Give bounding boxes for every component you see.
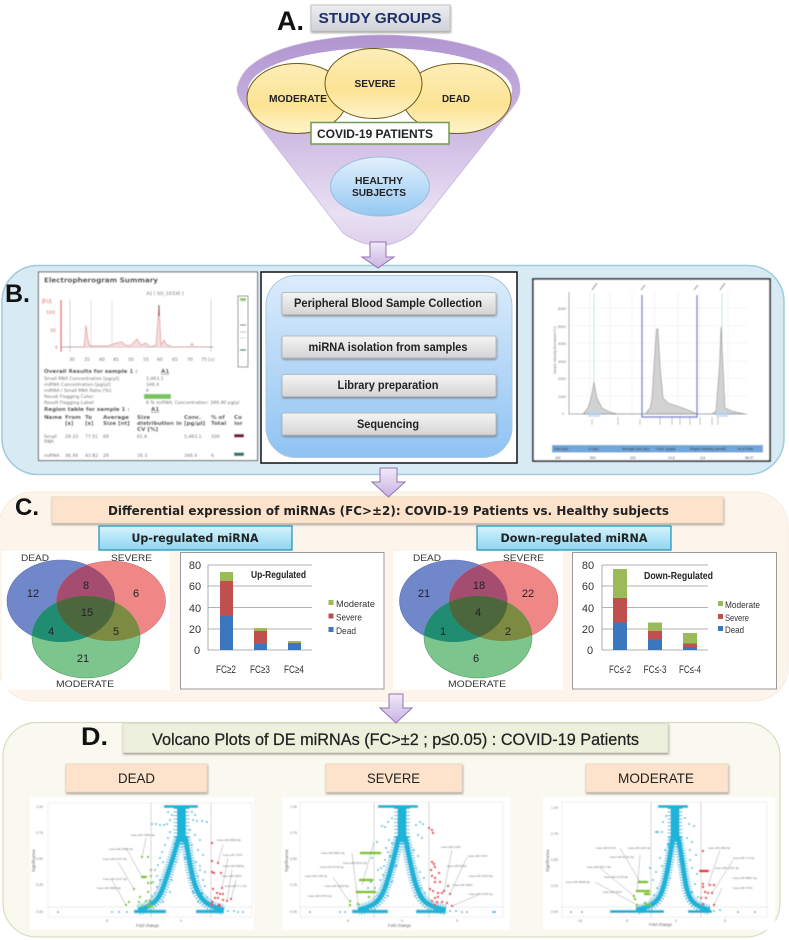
step: sequencing bbox=[282, 413, 496, 435]
volcano plot: severe: hsa-miR-7974 bbox=[468, 854, 488, 858]
stacked bar chart: down-regulated: Severe bbox=[725, 613, 749, 624]
electropherogram summary: To bbox=[85, 415, 92, 421]
electropherogram summary: Average bbox=[103, 415, 129, 421]
electropherogram summary: 70 bbox=[187, 357, 193, 363]
electropherogram summary: lor bbox=[234, 421, 243, 427]
volcano plot: dead: 0.75 bbox=[36, 831, 43, 835]
electropherogram summary: 45 bbox=[113, 357, 119, 363]
venn diagram: down-regulated: MODERATE bbox=[448, 679, 506, 689]
step: miRNA isolation bbox=[282, 336, 496, 358]
small RNA bioanalyzer trace: Start (bp) bbox=[554, 447, 568, 451]
electropherogram summary: Result Flagging Color: bbox=[44, 394, 95, 400]
electropherogram summary bbox=[38, 272, 258, 460]
volcano plot: severe: hsa-miR-1269 bbox=[441, 845, 461, 849]
stacked bar chart: down-regulated: FC≤-4 bbox=[679, 664, 701, 676]
electropherogram summary: 36.46 bbox=[65, 453, 78, 459]
volcano plot: severe: 5 bbox=[456, 919, 458, 923]
volcano plot: severe: hsa-miR-3926-5p bbox=[325, 884, 349, 888]
stacked bar chart: up-regulated: FC≥4 bbox=[284, 664, 304, 676]
stacked bar chart: down-regulated bbox=[572, 552, 776, 689]
volcano plot: severe: 0.25 bbox=[290, 883, 297, 887]
oval: moderate bbox=[247, 64, 347, 134]
volcano plot: moderate: hsa-miR-5617-5p bbox=[587, 865, 611, 869]
volcano plot: dead: hsa-miR-7-1-3p bbox=[225, 884, 247, 888]
volcano plot: dead: hsa-miR-6869-5p bbox=[217, 838, 241, 842]
heading: study groups bbox=[311, 5, 450, 31]
oval: dead bbox=[403, 64, 511, 134]
venn diagram: up-regulated: MODERATE bbox=[56, 679, 114, 689]
panel background D bbox=[3, 722, 780, 937]
volcano plot: moderate bbox=[543, 797, 775, 930]
panel background C bbox=[0, 492, 788, 701]
workflow box bbox=[261, 272, 517, 463]
small RNA bioanalyzer trace: 14.8 bbox=[668, 456, 675, 460]
volcano plot: dead: 0.25 bbox=[36, 883, 43, 887]
stacked bar chart: down-regulated: 80 bbox=[582, 560, 594, 572]
electropherogram summary: 6 % miRNA; Concentration: 346.40 pg/µl bbox=[146, 400, 239, 406]
electropherogram summary: Size bbox=[137, 415, 150, 421]
venn diagram: down-regulated: 22 bbox=[522, 588, 534, 600]
letter A: A. bbox=[277, 6, 304, 36]
section D: volcano plots panel bbox=[3, 722, 780, 937]
oval: healthy subjects bbox=[330, 157, 430, 216]
electropherogram summary: 100 bbox=[211, 434, 220, 440]
volcano plot: moderate: hsa-miR-6887-3p bbox=[733, 876, 757, 880]
stacked bar chart: up-regulated: FC≥3 bbox=[250, 664, 270, 676]
venn diagram: down-regulated: 21 bbox=[418, 588, 430, 600]
stacked bar chart: down-regulated: Moderate bbox=[725, 600, 760, 611]
venn diagram: down-regulated: 18 bbox=[473, 580, 485, 592]
heading: volcano plots bbox=[123, 724, 668, 752]
oval: severe: SEVERE bbox=[354, 79, 396, 90]
electropherogram summary: A1 [ SO_10330 ] bbox=[146, 291, 184, 297]
venn diagram: up-regulated: 5 bbox=[113, 626, 119, 638]
volcano plot: severe: hsa-miR-6752-3p bbox=[308, 894, 332, 898]
electropherogram summary: 55 bbox=[143, 357, 149, 363]
small RNA bioanalyzer trace: 6000 bbox=[558, 307, 566, 311]
volcano plot: dead: Significance bbox=[31, 849, 36, 872]
heading: differential expression: Differential expression of miRNAs (FC>±2): COVID-19 Patients vs. Healthy subjects bbox=[108, 503, 669, 518]
label: moderate bbox=[586, 764, 728, 792]
volcano plot: dead: hsa-miR-3127-3p bbox=[103, 877, 127, 881]
stacked bar chart: up-regulated: 20 bbox=[189, 624, 201, 636]
small RNA bioanalyzer trace: 5000 bbox=[558, 325, 566, 329]
small RNA bioanalyzer trace: 98.07 bbox=[745, 456, 754, 460]
volcano plot: dead: hsa-miR-3605 bbox=[222, 874, 242, 878]
heading: down-regulated bbox=[477, 526, 671, 550]
small RNA bioanalyzer trace: 114 bbox=[700, 456, 706, 460]
volcano plot: severe: hsa-miR-1843-5p bbox=[469, 874, 493, 878]
electropherogram summary: 6 bbox=[211, 453, 214, 459]
small RNA bioanalyzer trace: 500 bbox=[590, 456, 596, 460]
small RNA bioanalyzer trace: % of Total bbox=[738, 447, 753, 451]
electropherogram summary: 30 bbox=[69, 357, 75, 363]
venn diagram: down-regulated: 4 bbox=[475, 607, 481, 619]
stacked bar chart: down-regulated: Dead bbox=[725, 625, 744, 636]
volcano plot: severe: 0.50 bbox=[290, 857, 297, 861]
venn diagram: up-regulated: 4 bbox=[48, 626, 54, 638]
volcano plot: moderate: hsa-miR-339-3p bbox=[628, 846, 650, 850]
stacked bar chart: up-regulated bbox=[180, 552, 384, 689]
electropherogram summary: miRNA / Small RNA Ratio [%]: bbox=[44, 388, 113, 394]
electropherogram summary: 346.4 bbox=[146, 382, 159, 388]
panel background B bbox=[2, 266, 784, 474]
volcano plot: moderate: 1.00 bbox=[551, 806, 558, 810]
volcano plot: moderate: hsa-miR-490-5p bbox=[708, 846, 730, 850]
stacked bar chart: down-regulated: 20 bbox=[582, 624, 594, 636]
oval: moderate: MODERATE bbox=[269, 94, 327, 105]
volcano plot: dead bbox=[30, 797, 254, 930]
electropherogram summary: Co bbox=[234, 415, 242, 421]
small RNA bioanalyzer trace: 100 bbox=[555, 456, 561, 460]
volcano plot: severe: Significance bbox=[284, 849, 289, 872]
volcano plot: moderate: 0.75 bbox=[551, 832, 558, 836]
volcano plot: moderate: 5 bbox=[724, 919, 726, 923]
volcano plot: dead: hsa-miR-6727-5p bbox=[103, 857, 127, 861]
oval: healthy subjects: SUBJECTS bbox=[352, 188, 406, 199]
electropherogram summary: Electropherogram Summary bbox=[44, 276, 159, 284]
arrow A to B bbox=[362, 242, 394, 268]
heading: down-regulated: Down-regulated miRNA bbox=[500, 531, 648, 545]
oval: dead: DEAD bbox=[442, 94, 470, 105]
small RNA bioanalyzer trace: Conc. (pg/µl) bbox=[656, 447, 675, 451]
volcano plot: dead: 0 bbox=[180, 919, 182, 923]
volcano plot: dead: 0.00 bbox=[36, 910, 43, 914]
step: miRNA isolation: miRNA isolation from samples bbox=[308, 340, 468, 354]
label: covid-19 patients bbox=[311, 122, 449, 144]
stacked bar chart: down-regulated: Down-Regulated bbox=[644, 571, 713, 582]
stacked bar chart: up-regulated: Dead bbox=[336, 626, 356, 637]
volcano plot: severe: hsa-miR-4749-3p bbox=[320, 865, 344, 869]
volcano plot: dead: hsa-miR-3065-3p bbox=[109, 847, 133, 851]
step: blood collection bbox=[282, 292, 496, 314]
volcano plot: moderate: hsa-miR-7-2-3p bbox=[733, 856, 755, 860]
volcano plot: severe: 0.75 bbox=[290, 831, 297, 835]
electropherogram summary: 16.3 bbox=[137, 453, 147, 459]
step: library preparation: Library preparation bbox=[338, 378, 438, 392]
volcano plot: moderate: hsa-miR-6729-3p bbox=[610, 855, 634, 859]
small RNA bioanalyzer trace: Sample Intensity [Normalized FU] bbox=[553, 326, 557, 374]
electropherogram summary: 43.82 bbox=[85, 453, 98, 459]
volcano plot: dead: 0.50 bbox=[36, 857, 43, 861]
section C: differential expression panel bbox=[0, 492, 788, 701]
electropherogram summary: [pg/µl] bbox=[184, 421, 206, 427]
electropherogram summary: 60 bbox=[157, 357, 163, 363]
venn diagram: down-regulated: 1 bbox=[440, 626, 446, 638]
stacked bar chart: up-regulated: Severe bbox=[336, 612, 362, 624]
electropherogram summary: 75 [s] bbox=[201, 357, 214, 363]
stacked bar chart: down-regulated: 0 bbox=[587, 645, 593, 657]
arrow C to D bbox=[380, 694, 412, 723]
electropherogram summary: 50 bbox=[50, 328, 56, 334]
stacked bar chart: down-regulated: FC≤-3 bbox=[644, 664, 666, 676]
stacked bar chart: up-regulated: FC≥2 bbox=[216, 664, 236, 676]
venn diagram: up-regulated: 12 bbox=[27, 588, 39, 600]
label: covid-19 patients: COVID-19 PATIENTS bbox=[317, 129, 433, 141]
volcano plot: dead: hsa-miR-7974 bbox=[223, 853, 243, 857]
small RNA bioanalyzer trace: Region Molarity (nmol/l) bbox=[690, 447, 726, 451]
venn diagram: up-regulated: 21 bbox=[77, 653, 89, 665]
letter B: B. bbox=[5, 280, 30, 308]
volcano plot: moderate: hsa-miR-3126-3p bbox=[604, 875, 628, 879]
electropherogram summary: Size [nt] bbox=[103, 421, 130, 427]
electropherogram summary: [s] bbox=[85, 421, 94, 427]
small RNA bioanalyzer trace: 4000 bbox=[558, 342, 566, 346]
oval: severe bbox=[325, 48, 422, 118]
volcano plot: dead: -5 bbox=[105, 919, 108, 923]
electropherogram summary: 0 bbox=[55, 345, 58, 351]
volcano plot: severe: hsa-miR-128-3p bbox=[305, 874, 327, 878]
venn diagram: up-regulated: 6 bbox=[133, 588, 139, 600]
electropherogram summary: 69 bbox=[103, 434, 109, 440]
volcano plot: moderate: Significance bbox=[545, 849, 550, 872]
electropherogram summary: 346.4 bbox=[184, 453, 197, 459]
small RNA bioanalyzer trace: 233 bbox=[630, 456, 636, 460]
section A: study groups bbox=[237, 5, 520, 246]
small RNA bioanalyzer trace bbox=[533, 279, 770, 461]
small RNA bioanalyzer trace: 1000 bbox=[558, 395, 566, 399]
volcano plot: moderate: hsa-miR-4698-5p bbox=[566, 880, 590, 884]
label: severe bbox=[326, 764, 462, 792]
volcano plot: moderate: -5 bbox=[625, 919, 628, 923]
electropherogram summary: 61.6 bbox=[137, 434, 147, 440]
label: dead bbox=[66, 764, 207, 792]
electropherogram summary: 100 bbox=[46, 310, 55, 316]
heading: up-regulated: Up-regulated miRNA bbox=[132, 531, 259, 545]
electropherogram summary: 40 bbox=[99, 357, 105, 363]
heading: volcano plots: Volcano Plots of DE miRNAs (FC>±2 ; p≤0.05) : COVID-19 Patients bbox=[152, 730, 639, 749]
electropherogram summary: 77.01 bbox=[85, 434, 98, 440]
label: severe: SEVERE bbox=[367, 770, 420, 786]
volcano plot: severe: 1.00 bbox=[290, 805, 297, 809]
heading: differential expression bbox=[52, 497, 723, 523]
volcano plot: dead: Fold change bbox=[136, 923, 160, 928]
oval: healthy subjects: HEALTHY bbox=[355, 176, 403, 187]
volcano plot: moderate: hsa-miR-7974 bbox=[733, 886, 753, 890]
electropherogram summary: RNA bbox=[44, 439, 55, 445]
venn diagram: down-regulated: 6 bbox=[473, 653, 479, 665]
small RNA bioanalyzer trace: 2000 bbox=[558, 377, 566, 381]
venn diagram: up-regulated: 8 bbox=[83, 580, 89, 592]
volcano plot: severe: hsa-miR-5010-3p bbox=[343, 861, 367, 865]
venn diagram: up-regulated bbox=[0, 550, 170, 690]
electropherogram summary: 65 bbox=[172, 357, 178, 363]
volcano plot: severe: hsa-miR-5195-3p bbox=[469, 892, 493, 896]
electropherogram summary: Small bbox=[44, 434, 57, 440]
electropherogram summary: [FU] bbox=[42, 299, 52, 305]
volcano plot: moderate: 0 bbox=[675, 919, 677, 923]
venn diagram: down-regulated: 2 bbox=[505, 626, 511, 638]
electropherogram summary: From bbox=[65, 415, 81, 421]
electropherogram summary: A1 bbox=[161, 369, 169, 375]
electropherogram summary: Result Flagging Label: bbox=[44, 400, 95, 406]
step: sequencing: Sequencing bbox=[357, 417, 419, 431]
stacked bar chart: up-regulated: 0 bbox=[194, 645, 200, 657]
stacked bar chart: down-regulated: FC≤-2 bbox=[609, 664, 631, 676]
electropherogram summary: 6 bbox=[146, 388, 149, 394]
volcano plot: severe: Fold change bbox=[388, 923, 412, 928]
stacked bar chart: up-regulated: Moderate bbox=[336, 599, 375, 610]
stacked bar chart: up-regulated: 60 bbox=[189, 581, 201, 593]
small RNA bioanalyzer trace: 3000 bbox=[558, 360, 566, 364]
small RNA bioanalyzer trace: To (bp) bbox=[588, 447, 599, 451]
venn diagram: up-regulated: DEAD bbox=[21, 553, 50, 563]
volcano plot: severe: hsa-miR-5010 bbox=[447, 864, 467, 868]
electropherogram summary: Conc. bbox=[184, 415, 201, 421]
letter D: D. bbox=[81, 723, 108, 751]
section B: sample processing panel bbox=[2, 266, 784, 474]
volcano plot: moderate: 0.00 bbox=[551, 910, 558, 914]
volcano plot: moderate: hsa-miR-6729 bbox=[596, 846, 616, 850]
label: moderate: MODERATE bbox=[618, 770, 694, 786]
heading: up-regulated bbox=[99, 526, 292, 550]
electropherogram summary: 29 bbox=[103, 453, 109, 459]
stacked bar chart: up-regulated: 40 bbox=[189, 603, 201, 615]
volcano plot: severe: -5 bbox=[346, 919, 349, 923]
heading: study groups: STUDY GROUPS bbox=[318, 11, 442, 27]
volcano plot: severe: hsa-miR-3950 bbox=[453, 883, 473, 887]
electropherogram summary: CV [%] bbox=[137, 427, 159, 433]
venn diagram: up-regulated: 15 bbox=[81, 607, 93, 619]
volcano plot: dead: hsa-miR-7852-3p bbox=[131, 833, 155, 837]
label: dead: DEAD bbox=[118, 770, 155, 786]
volcano plot: severe: 0.00 bbox=[290, 910, 297, 914]
venn diagram: down-regulated: DEAD bbox=[413, 553, 442, 563]
letter C: C. bbox=[15, 494, 39, 521]
electropherogram summary: miRNA Concentration [pg/µl]: bbox=[44, 382, 112, 388]
electropherogram summary: Overall Results for sample 1 : bbox=[44, 369, 137, 375]
volcano plot: moderate: hsa-miR-3617 bbox=[603, 890, 623, 894]
arrow B to C bbox=[372, 468, 405, 497]
volcano plot: moderate: 0.50 bbox=[551, 858, 558, 862]
electropherogram summary: 35 bbox=[84, 357, 90, 363]
electropherogram summary: 29.33 bbox=[65, 434, 78, 440]
volcano plot: moderate: 0.25 bbox=[551, 884, 558, 888]
electropherogram summary: Name bbox=[44, 415, 62, 421]
volcano plot: dead: hsa-miR-5585p bbox=[223, 864, 244, 868]
volcano plot: severe: hsa-miR-6891-5p bbox=[321, 851, 345, 855]
electropherogram summary: % of bbox=[211, 415, 225, 421]
electropherogram summary: Region table for sample 1 : bbox=[44, 407, 130, 413]
venn diagram: down-regulated bbox=[393, 550, 563, 690]
stacked bar chart: down-regulated: 40 bbox=[582, 603, 594, 615]
volcano plot: dead: 1.00 bbox=[36, 805, 43, 809]
electropherogram summary: [s] bbox=[65, 421, 74, 427]
electropherogram summary: 5,463.1 bbox=[184, 434, 202, 440]
electropherogram summary: A1 bbox=[151, 407, 159, 413]
volcano plot: moderate: Fold change bbox=[649, 922, 673, 927]
step: library preparation bbox=[282, 374, 496, 396]
step: blood collection: Peripheral Blood Sample Collection bbox=[294, 296, 482, 310]
small RNA bioanalyzer trace: 0 bbox=[562, 412, 564, 416]
electropherogram summary: miRNA bbox=[44, 453, 60, 459]
volcano plot: dead: hsa-miR-4685-3p bbox=[97, 886, 121, 890]
electropherogram summary: distribution in bbox=[137, 421, 182, 427]
electropherogram summary: 50 bbox=[128, 357, 134, 363]
venn diagram: down-regulated: SEVERE bbox=[503, 553, 544, 563]
volcano plot: severe bbox=[282, 797, 510, 930]
electropherogram summary: Total bbox=[211, 421, 226, 427]
small RNA bioanalyzer trace: Average Size (bp) bbox=[622, 447, 649, 451]
stacked bar chart: down-regulated: 60 bbox=[582, 581, 594, 593]
funnel bbox=[237, 35, 520, 246]
volcano plot: severe: 0 bbox=[401, 919, 403, 923]
electropherogram summary: Small RNA Concentration [pg/µl]: bbox=[44, 376, 121, 382]
volcano plot: moderate: -10 bbox=[577, 919, 582, 923]
stacked bar chart: up-regulated: Up-Regulated bbox=[251, 570, 306, 581]
volcano plot: moderate: hsa-miR-1301-3p bbox=[715, 866, 739, 870]
venn diagram: up-regulated: SEVERE bbox=[111, 553, 152, 563]
stacked bar chart: up-regulated: 80 bbox=[189, 560, 201, 572]
electropherogram summary: 5,463.1 bbox=[146, 376, 164, 382]
